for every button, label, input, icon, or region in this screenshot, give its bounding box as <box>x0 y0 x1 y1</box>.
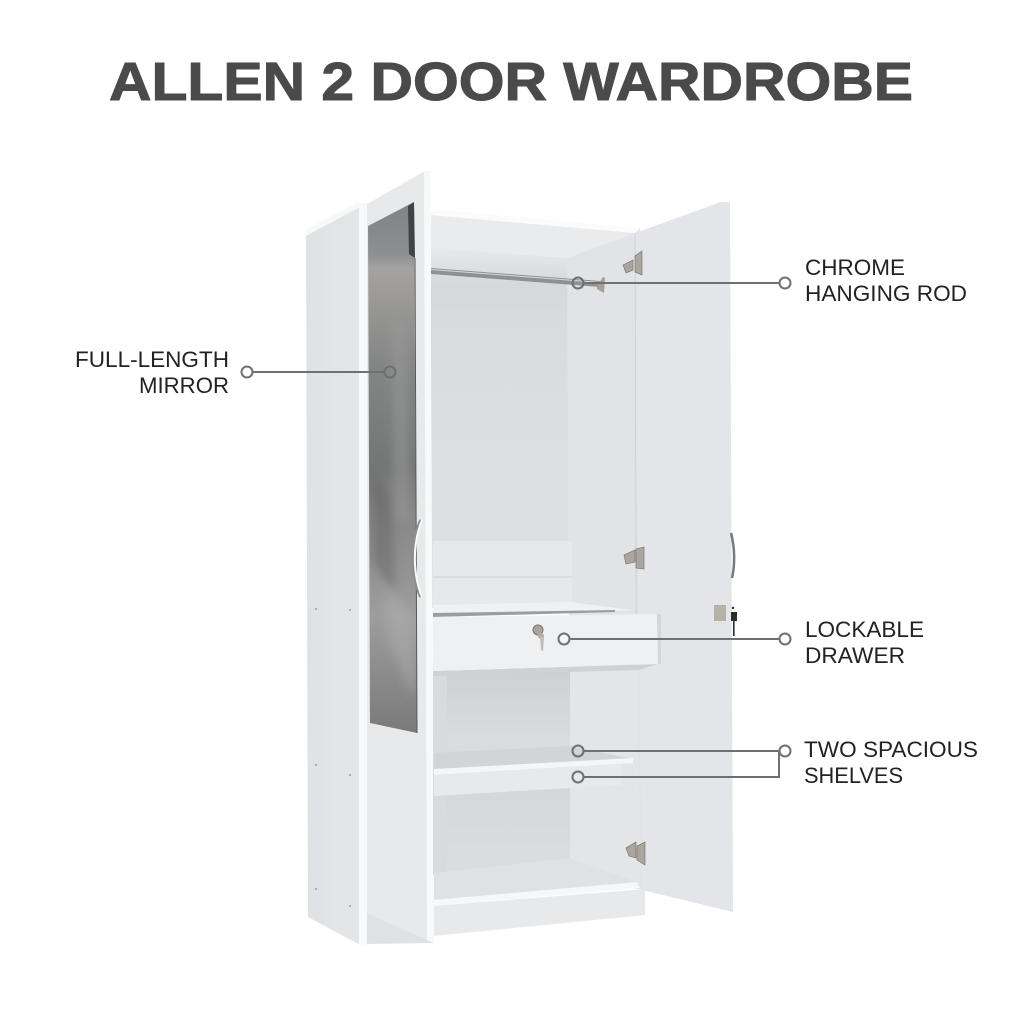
callout: full-length mirror: MIRROR <box>139 373 229 398</box>
callout: chrome hanging rod <box>572 255 967 306</box>
icon: full-length mirror <box>368 202 417 733</box>
hanging rod <box>431 268 600 287</box>
callout: two spacious shelves: TWO SPACIOUS <box>804 737 978 762</box>
interior right wall <box>567 228 645 890</box>
rod bracket <box>597 277 605 293</box>
icon: drawer lock <box>533 625 544 651</box>
icon: door key <box>731 607 737 636</box>
drawer shadow <box>433 664 658 676</box>
shelf 1 <box>434 746 633 769</box>
callout: full-length mirror: FULL-LENGTH <box>75 347 229 372</box>
left door <box>367 171 434 943</box>
callout: two spacious shelves <box>572 737 978 788</box>
lower compartment right wall <box>570 664 640 884</box>
callout: lockable drawer: DRAWER <box>805 643 905 668</box>
lower compartment back <box>433 669 570 875</box>
callout: chrome hanging rod: HANGING ROD <box>805 281 967 306</box>
wardrobe illustration <box>305 171 737 945</box>
icon: hinges <box>623 251 645 865</box>
icon: door lock plate <box>714 605 726 621</box>
side panel screw dots <box>315 608 351 907</box>
cabinet floor <box>434 858 637 900</box>
icon: right door handle <box>731 533 734 578</box>
drawer top <box>433 602 632 614</box>
lower back panel <box>433 541 572 607</box>
callout: lockable drawer: LOCKABLE <box>805 617 924 642</box>
callout: full-length mirror <box>75 347 396 398</box>
plinth below left door <box>367 913 434 944</box>
title: ALLEN 2 DOOR WARDROBE <box>109 52 913 112</box>
drawer front <box>433 614 658 671</box>
callout: two spacious shelves: SHELVES <box>804 763 903 788</box>
callout: lockable drawer <box>558 617 924 668</box>
icon: left door handle <box>413 520 422 597</box>
left side panel <box>306 203 360 945</box>
shelf 2 <box>434 764 622 796</box>
interior back wall <box>431 248 571 608</box>
interior ceiling <box>431 215 635 258</box>
right door <box>635 202 733 912</box>
callout: chrome hanging rod: CHROME <box>805 255 905 280</box>
